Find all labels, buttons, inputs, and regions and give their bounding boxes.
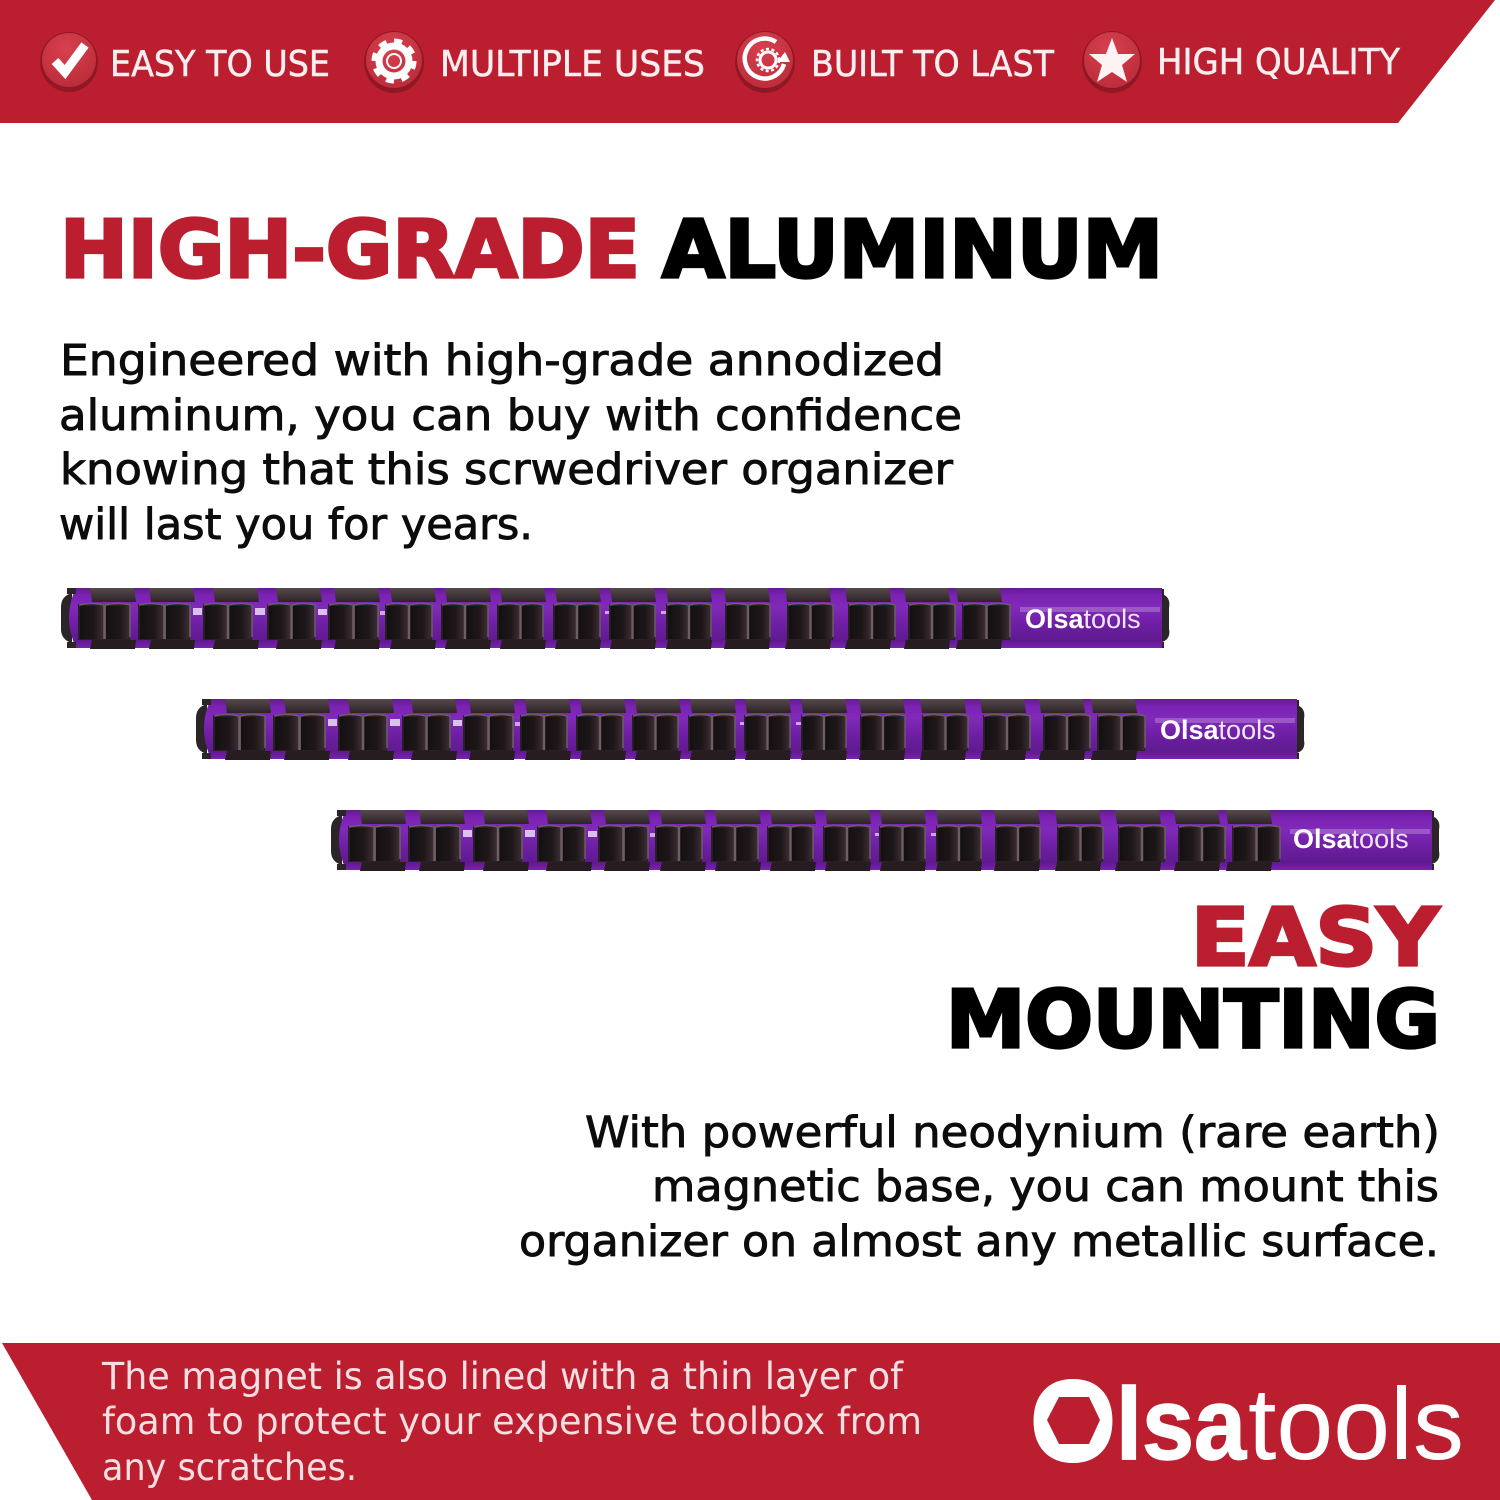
icon: refresh gear [735, 31, 795, 93]
text block: foam note: any scratches. [102, 1446, 357, 1489]
product: organizer rail 3: Olsatools [1293, 824, 1409, 854]
logo: Olsatools: lsa [1116, 1367, 1247, 1481]
text block: aluminum description: will last you for years. [59, 500, 533, 550]
text block: foam note [101, 1355, 922, 1489]
label: built to last: BUILT TO LAST [811, 44, 1055, 85]
icon: star [1082, 31, 1142, 93]
text block: mounting description: organizer on almost any metallic surface. [519, 1217, 1439, 1267]
text block: aluminum description: Engineered with high-grade annodized [60, 336, 944, 386]
product: organizer rail 1 [61, 588, 1169, 649]
label: high quality: HIGH QUALITY [1157, 42, 1401, 83]
icon: check mark [40, 32, 98, 92]
label: easy to use: EASY TO USE [110, 44, 330, 85]
product: organizer rail 2: Olsatools [1160, 715, 1276, 745]
text block: aluminum description: aluminum, you can buy with confidence [59, 391, 962, 441]
product: organizer rail 1: Olsatools [1025, 604, 1141, 634]
logo: Olsatools: O [1031, 1362, 1115, 1484]
bottom banner [2, 1343, 1500, 1500]
product: organizer rail 2 [196, 699, 1304, 760]
icon: gear [364, 31, 424, 93]
heading: easy mounting [946, 892, 1440, 1066]
text block: mounting description: magnetic base, you can mount this [652, 1162, 1439, 1212]
text block: aluminum description [59, 336, 962, 550]
logo: Olsatools [1031, 1362, 1464, 1484]
text block: aluminum description: knowing that this scrwedriver organizer [60, 445, 953, 495]
top banner [0, 0, 1495, 123]
text block: foam note: The magnet is also lined with a thin layer of [101, 1355, 904, 1398]
heading: high-grade aluminum: ALUMINUM [662, 204, 1163, 296]
text block: foam note: foam to protect your expensive toolbox from [102, 1400, 922, 1443]
heading: easy mounting: MOUNTING [946, 974, 1440, 1066]
logo: Olsatools: tools [1248, 1367, 1464, 1481]
heading: easy mounting: EASY [1191, 892, 1440, 984]
heading: high-grade aluminum [60, 204, 1163, 296]
label: multiple uses: MULTIPLE USES [440, 44, 705, 85]
text block: mounting description [519, 1108, 1440, 1267]
heading: high-grade aluminum: HIGH-GRADE [60, 204, 640, 296]
product: organizer rail 3 [331, 810, 1439, 871]
text block: mounting description: With powerful neodynium (rare earth) [585, 1108, 1440, 1158]
